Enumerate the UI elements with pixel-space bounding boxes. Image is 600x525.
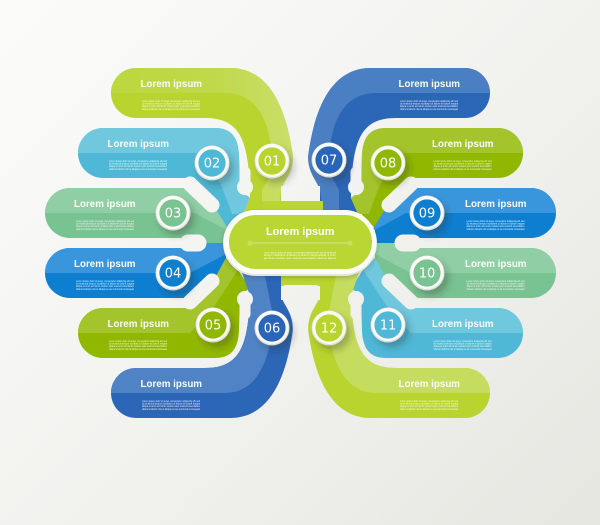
details 04: do eiusmod tempor incididunt ut labore et dolore magna	[76, 282, 134, 286]
badge 12	[312, 310, 346, 346]
panel 03	[45, 188, 230, 243]
title 08: Lorem ipsum	[432, 139, 494, 150]
details 02: do eiusmod tempor incididunt ut labore et dolore magna	[109, 162, 167, 166]
details 06: ullamco laboris nisi ut aliquip ex ea commodo consequat	[142, 407, 200, 411]
details 10: ullamco laboris nisi ut aliquip ex ea commodo consequat	[466, 287, 525, 291]
badge 05: 05	[205, 319, 221, 334]
details 02	[109, 159, 167, 171]
details 08	[434, 159, 492, 171]
details 01: Lorem ipsum dolor sit amet, consectetur adipiscing elit sed	[142, 99, 200, 103]
details 06	[142, 399, 200, 411]
details 08: do eiusmod tempor incididunt ut labore et dolore magna	[434, 162, 492, 166]
centre details: tempor incididunt ut labore et dolore magna aliqua ut enim	[264, 253, 337, 257]
badge 04	[156, 256, 190, 290]
details 03: do eiusmod tempor incididunt ut labore et dolore magna	[76, 222, 134, 226]
details 07: aliqua ut enim ad minim veniam quis nostrud exercitation	[400, 104, 458, 108]
details 11: ullamco laboris nisi ut aliquip ex ea commodo consequat	[434, 347, 492, 351]
badge 03	[156, 196, 190, 230]
details 02: aliqua ut enim ad minim veniam quis nostrud exercitation	[109, 164, 167, 168]
details 05: ullamco laboris nisi ut aliquip ex ea commodo consequat	[109, 347, 167, 351]
details 10	[466, 279, 525, 291]
details 07	[400, 99, 458, 111]
title 03: Lorem ipsum	[74, 199, 136, 210]
badge 08: 08	[380, 157, 396, 172]
title 12: Lorem ipsum	[398, 379, 460, 390]
details 11: aliqua ut enim ad minim veniam quis nostrud exercitation	[434, 344, 492, 348]
badge 08	[370, 146, 406, 180]
badge 11	[370, 308, 406, 342]
badge 04: 04	[165, 267, 181, 282]
details 01: do eiusmod tempor incididunt ut labore et dolore magna	[142, 102, 200, 106]
details 08: ullamco laboris nisi ut aliquip ex ea commodo consequat	[434, 167, 492, 171]
panel 06	[111, 261, 293, 418]
details 01: aliqua ut enim ad minim veniam quis nostrud exercitation	[142, 104, 200, 108]
badge 05	[196, 308, 230, 342]
details 04	[76, 279, 134, 291]
details 07: do eiusmod tempor incididunt ut labore et dolore magna	[400, 102, 458, 106]
details 03: aliqua ut enim ad minim veniam quis nostrud exercitation	[76, 224, 134, 228]
details 04: ullamco laboris nisi ut aliquip ex ea commodo consequat	[76, 287, 134, 291]
panel 09	[371, 188, 556, 243]
panel 10	[371, 243, 556, 298]
details 11: do eiusmod tempor incididunt ut labore et dolore magna	[434, 342, 492, 346]
details 07: ullamco laboris nisi ut aliquip ex ea commodo consequat	[400, 107, 458, 111]
centre details	[264, 250, 337, 260]
panel 07	[308, 68, 490, 225]
details 04: aliqua ut enim ad minim veniam quis nostrud exercitation	[76, 284, 134, 288]
badge 10	[410, 256, 444, 290]
panel 04	[45, 243, 230, 298]
details 12: do eiusmod tempor incididunt ut labore et dolore magna	[400, 402, 458, 406]
badge 01: 01	[264, 155, 280, 170]
title 04: Lorem ipsum	[74, 259, 136, 270]
details 03: ullamco laboris nisi ut aliquip ex ea commodo consequat	[76, 227, 134, 231]
title 10: Lorem ipsum	[465, 259, 527, 270]
panel 01	[111, 68, 293, 225]
details 11: Lorem ipsum dolor sit amet, consectetur adipiscing elit sed	[434, 339, 492, 343]
title 09: Lorem ipsum	[465, 199, 527, 210]
details 12: ullamco laboris nisi ut aliquip ex ea commodo consequat	[400, 407, 458, 411]
details 03: Lorem ipsum dolor sit amet, consectetur adipiscing elit sed	[76, 219, 134, 223]
details 03	[76, 219, 134, 231]
centre details: Lorem ipsum dolor sit amet, consectetur adipiscing elit sed do eiusmod	[264, 250, 336, 254]
title 07: Lorem ipsum	[398, 79, 460, 90]
centre divider	[247, 240, 353, 246]
details 09	[466, 219, 525, 231]
details 01	[142, 99, 200, 111]
panel 02	[78, 128, 250, 228]
details 08: Lorem ipsum dolor sit amet, consectetur adipiscing elit sed	[434, 159, 492, 163]
details 09: do eiusmod tempor incididunt ut labore et dolore magna	[466, 222, 525, 226]
details 02: ullamco laboris nisi ut aliquip ex ea commodo consequat	[109, 167, 167, 171]
title 01: Lorem ipsum	[140, 79, 202, 90]
details 09: aliqua ut enim ad minim veniam quis nostrud exercitation	[466, 224, 525, 228]
panel 12	[308, 261, 490, 418]
badge 06: 06	[264, 322, 280, 337]
title 05: Lorem ipsum	[108, 319, 169, 330]
badge 07	[312, 142, 346, 178]
badge 12: 12	[321, 322, 337, 337]
details 08: aliqua ut enim ad minim veniam quis nostrud exercitation	[434, 164, 492, 168]
details 12	[400, 399, 458, 411]
badge 07: 07	[321, 154, 337, 169]
title 02: Lorem ipsum	[108, 139, 169, 150]
details 12: Lorem ipsum dolor sit amet, consectetur adipiscing elit sed	[400, 399, 458, 403]
centre details: ad minim veniam quis nostrud exercitation ullamco laboris	[264, 256, 337, 260]
details 09: ullamco laboris nisi ut aliquip ex ea commodo consequat	[466, 227, 525, 231]
title 06: Lorem ipsum	[140, 379, 202, 390]
details 05	[109, 339, 167, 351]
details 05: do eiusmod tempor incididunt ut labore et dolore magna	[109, 342, 167, 346]
centre title: Lorem ipsum	[266, 226, 335, 238]
badge 09: 09	[419, 207, 435, 222]
details 04: Lorem ipsum dolor sit amet, consectetur adipiscing elit sed	[76, 279, 134, 283]
details 10: aliqua ut enim ad minim veniam quis nostrud exercitation	[466, 284, 525, 288]
badge 10: 10	[419, 267, 435, 282]
details 01: ullamco laboris nisi ut aliquip ex ea commodo consequat	[142, 107, 200, 111]
details 06: do eiusmod tempor incididunt ut labore et dolore magna	[142, 402, 200, 406]
details 07: Lorem ipsum dolor sit amet, consectetur adipiscing elit sed	[400, 99, 458, 103]
badge 02	[194, 146, 230, 180]
title 11: Lorem ipsum	[432, 319, 494, 330]
details 09: Lorem ipsum dolor sit amet, consectetur adipiscing elit sed	[466, 219, 525, 223]
details 06: aliqua ut enim ad minim veniam quis nostrud exercitation	[142, 404, 200, 408]
details 12: aliqua ut enim ad minim veniam quis nostrud exercitation	[400, 404, 458, 408]
badge 06	[254, 310, 290, 346]
details 02: Lorem ipsum dolor sit amet, consectetur adipiscing elit sed	[109, 159, 167, 163]
badge 03: 03	[165, 207, 181, 222]
panel 08	[351, 128, 523, 228]
panel 11	[351, 258, 523, 358]
details 05: aliqua ut enim ad minim veniam quis nostrud exercitation	[109, 344, 167, 348]
details 10: do eiusmod tempor incididunt ut labore et dolore magna	[466, 282, 525, 286]
badge 01	[254, 144, 290, 178]
details 05: Lorem ipsum dolor sit amet, consectetur adipiscing elit sed	[109, 339, 167, 343]
panel 05	[78, 258, 250, 358]
details 10: Lorem ipsum dolor sit amet, consectetur adipiscing elit sed	[466, 279, 525, 283]
details 06: Lorem ipsum dolor sit amet, consectetur adipiscing elit sed	[142, 399, 200, 403]
badge 02: 02	[204, 157, 220, 172]
panel: centre	[223, 210, 377, 276]
badge 11: 11	[380, 319, 396, 334]
details 11	[434, 339, 492, 351]
badge 09	[410, 196, 444, 230]
